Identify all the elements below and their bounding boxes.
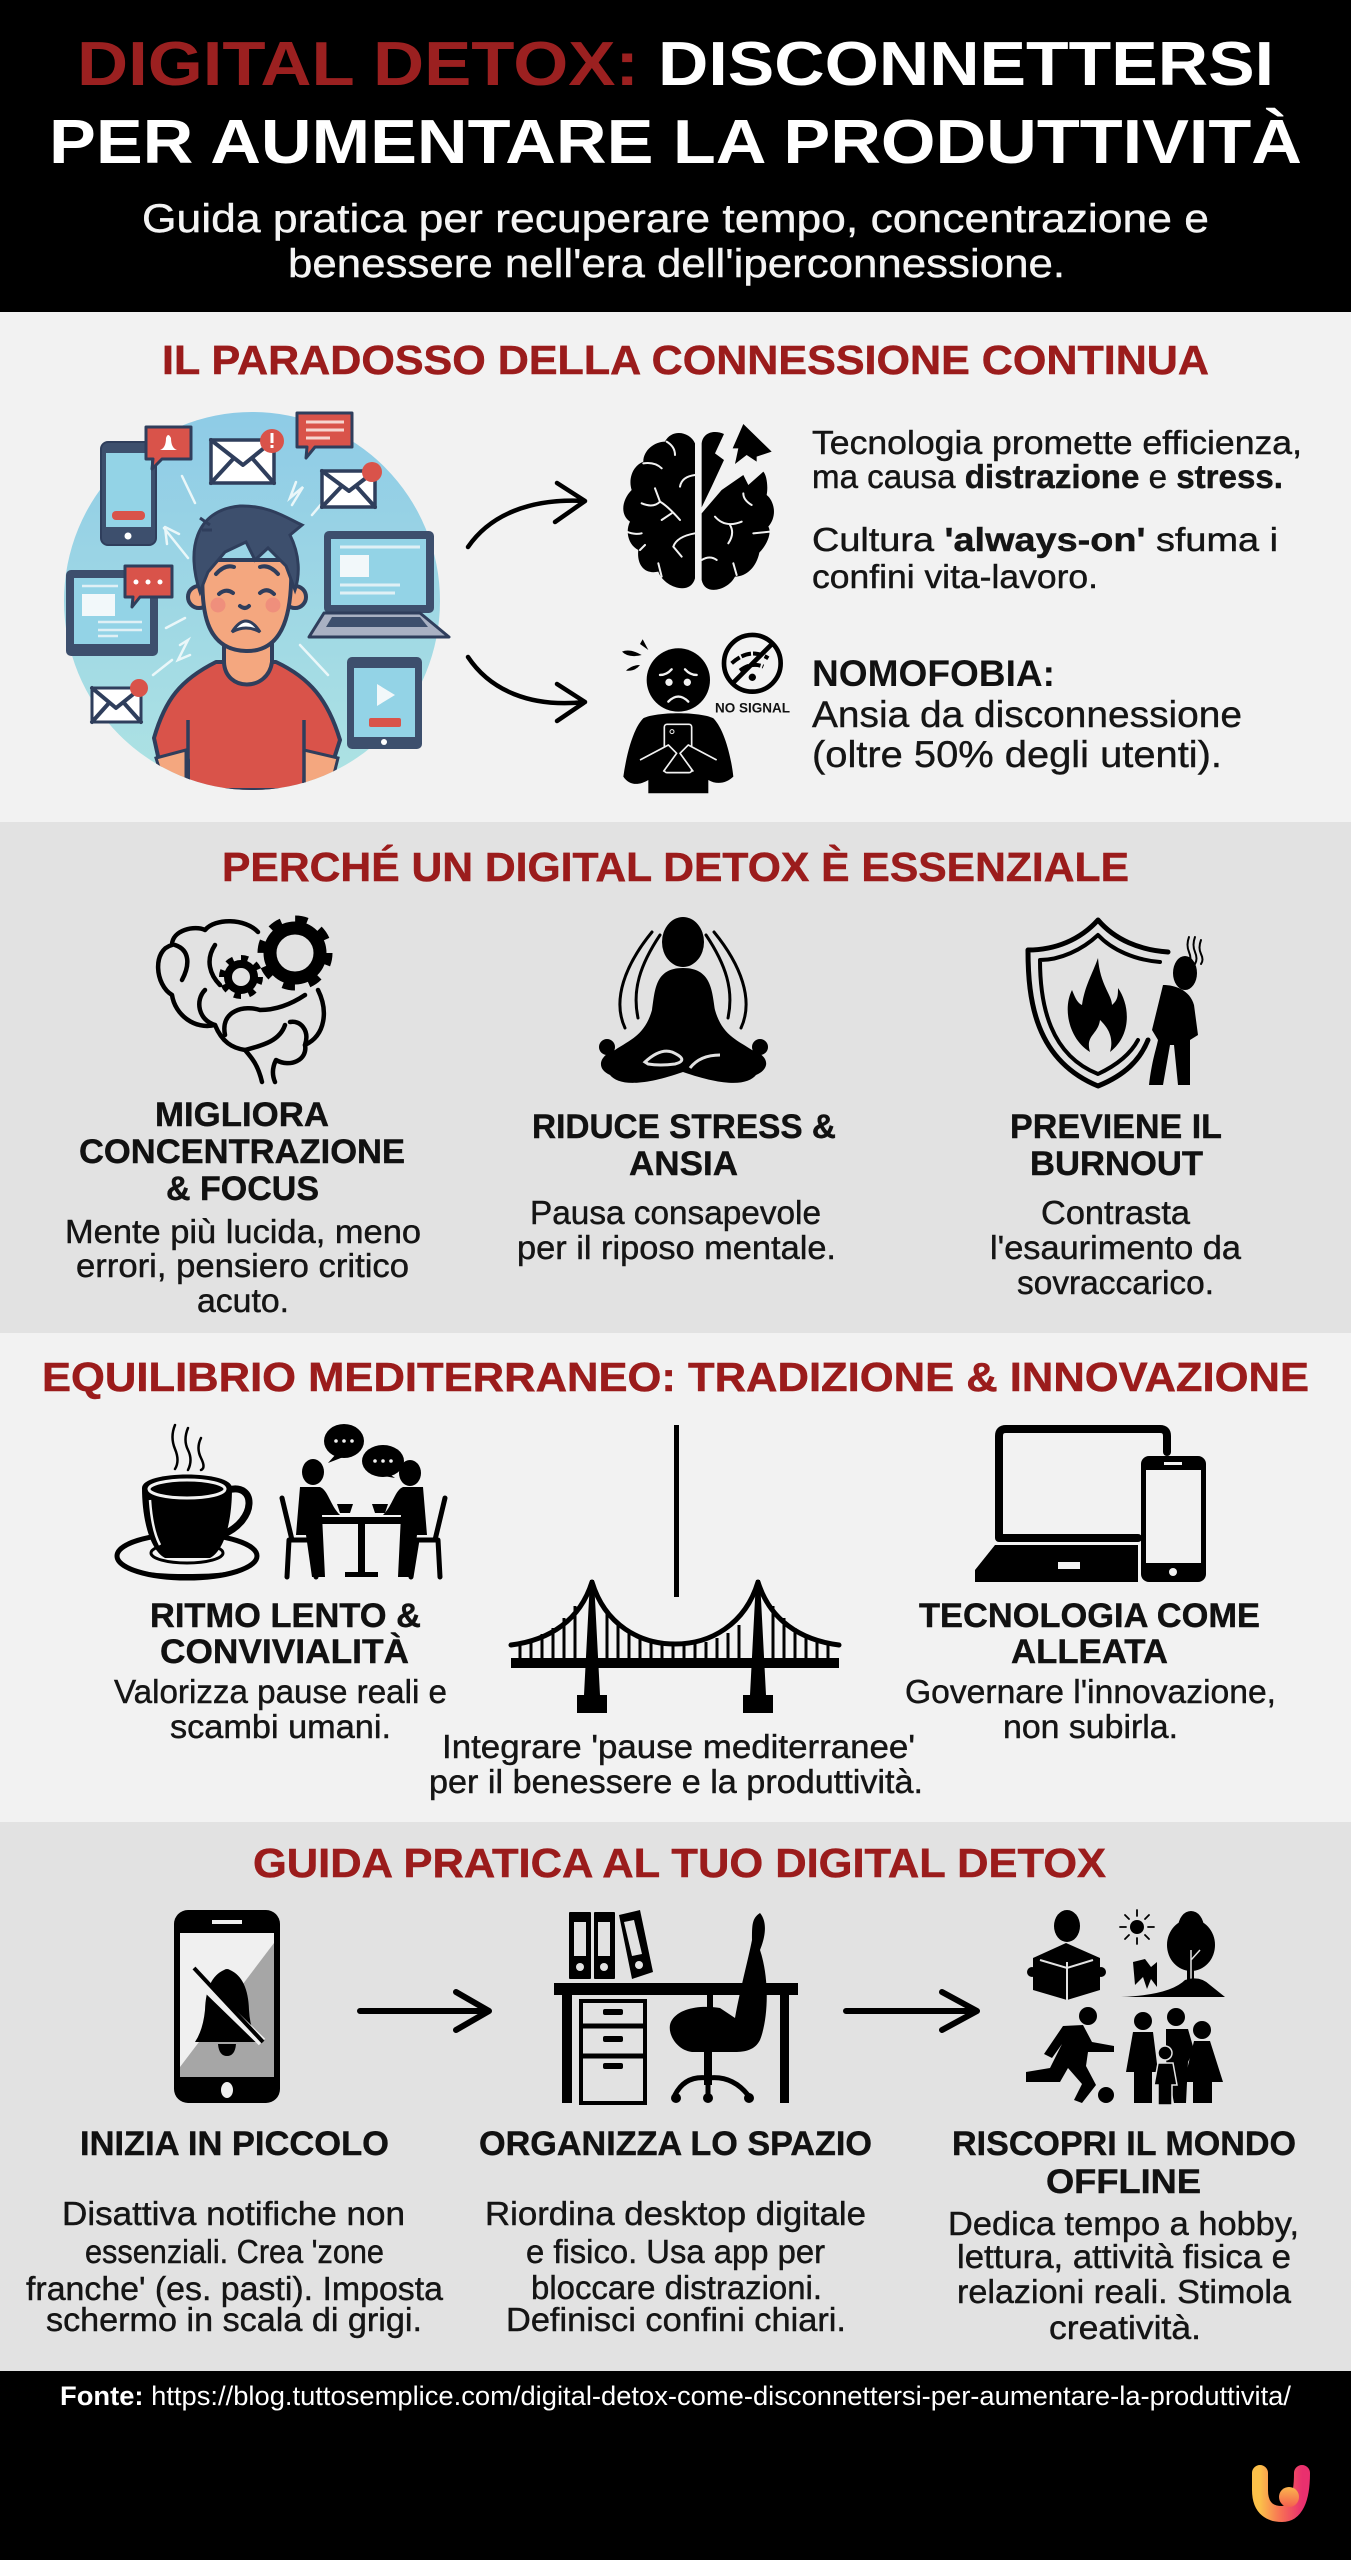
text: nomofobia: Ansia da disconnessione: [812, 694, 1242, 735]
column: inizia in piccolo: essenziali. Crea 'zone: [85, 2233, 384, 2270]
text: nomofobia: NOMOFOBIA:: [812, 653, 1055, 694]
column: burnout: [990, 1108, 1242, 1301]
column: concentrazione: errori, pensiero critico: [76, 1247, 409, 1284]
column: organizza lo spazio: bloccare distrazioni.: [531, 2269, 822, 2306]
column: stress: Pausa consapevole: [530, 1194, 821, 1231]
column: organizza lo spazio: e fisico. Usa app per: [526, 2233, 825, 2270]
column: organizza lo spazio: Riordina desktop digitale: [485, 2195, 866, 2232]
column: organizza lo spazio: [479, 2125, 872, 2338]
column: riscopri il mondo offline: relazioni reali. Stimola: [957, 2273, 1292, 2310]
footer: [0, 2371, 1351, 2560]
column: inizia in piccolo: [26, 2125, 444, 2338]
text: technology promise: Cultura 'always-on' sfuma i: [812, 521, 1278, 558]
column: riscopri il mondo offline: Dedica tempo a hobby,: [948, 2205, 1299, 2242]
column: stress: per il riposo mentale.: [517, 1229, 836, 1266]
subtitle: [142, 197, 1209, 286]
column: ritmo lento: CONVIVIALITÀ: [160, 1633, 409, 1671]
icon: phone silent: [174, 1910, 280, 2103]
column: integrare: [429, 1728, 923, 1800]
column: concentrazione: MIGLIORA: [155, 1096, 329, 1134]
column: integrare: per il benessere e la produttività.: [429, 1763, 923, 1800]
column: concentrazione: [65, 1096, 421, 1319]
column: riscopri il mondo offline: lettura, attività fisica e: [957, 2238, 1291, 2275]
icon: offline activities: [1026, 1910, 1225, 2105]
text: technology promise: confini vita-lavoro.: [812, 558, 1098, 595]
illustration: overwhelmed person with devices: [64, 412, 449, 790]
column: stress: ANSIA: [629, 1145, 738, 1183]
icon: cracked brain: [623, 424, 774, 590]
column: burnout: l'esaurimento da: [990, 1229, 1242, 1266]
line: divider above bridge: [674, 1425, 679, 1597]
text: nomofobia: (oltre 50% degli utenti).: [812, 734, 1222, 775]
arrow: to distraction: [468, 483, 585, 547]
title line 1: [77, 30, 1274, 99]
column: burnout: Contrasta: [1041, 1194, 1191, 1231]
subtitle: Guida pratica per recuperare tempo, concentrazione e: [142, 197, 1209, 241]
devices: [66, 413, 449, 749]
column: stress: RIDUCE STRESS &: [532, 1108, 836, 1146]
column: tecnologia: non subirla.: [1003, 1708, 1178, 1745]
panel: equilibrio mediterraneo: [0, 1333, 1351, 1822]
icon: brain with gears: [158, 920, 328, 1082]
no signal label: NO SIGNAL: [715, 700, 790, 716]
icon: suspension bridge: [511, 1580, 839, 1713]
title line 1: DIGITAL DETOX:: [77, 30, 639, 99]
icon: people at table: [282, 1424, 445, 1577]
arrow: step two to three: [846, 1992, 977, 2030]
icon: coffee cup: [116, 1425, 258, 1580]
column: ritmo lento: Valorizza pause reali e: [114, 1673, 447, 1710]
column: burnout: BURNOUT: [1030, 1145, 1203, 1183]
column: stress: [517, 1108, 836, 1266]
text: technology promise: [812, 424, 1302, 595]
column: organizza lo spazio: Definisci confini chiari.: [506, 2301, 846, 2338]
heading: perché: PERCHÉ UN DIGITAL DETOX È ESSENZIALE: [222, 844, 1129, 890]
panel: perché un digital detox: [0, 822, 1351, 1333]
text: nomofobia: [812, 653, 1242, 775]
person: [154, 506, 340, 790]
column: tecnologia: Governare l'innovazione,: [905, 1673, 1276, 1710]
icon: tidy desk: [554, 1910, 798, 2103]
column: tecnologia: TECNOLOGIA COME: [919, 1597, 1260, 1635]
column: organizza lo spazio: ORGANIZZA LO SPAZIO: [479, 2125, 872, 2163]
heading: guida: GUIDA PRATICA AL TUO DIGITAL DETOX: [253, 1840, 1106, 1886]
icon: anxious person no signal: [622, 635, 790, 793]
column: inizia in piccolo: franche' (es. pasti). Imposta: [26, 2270, 444, 2307]
panel: guida pratica: [0, 1822, 1351, 2371]
icon: logo: [1260, 2473, 1302, 2514]
icon: shield flame burnout: [1028, 920, 1202, 1086]
column: ritmo lento: RITMO LENTO &: [150, 1597, 421, 1635]
title line 1: DISCONNETTERSI: [658, 30, 1274, 99]
source link text: Fonte: https://blog.tuttosemplice.com/digital-detox-come-disconnettersi-per-aumentare-la-produttivita/: [60, 2381, 1292, 2411]
column: concentrazione: & FOCUS: [166, 1170, 319, 1208]
subtitle: benessere nell'era dell'iperconnessione.: [288, 242, 1065, 286]
panel: paradosso della connessione: [0, 312, 1351, 822]
column: inizia in piccolo: Disattiva notifiche non: [62, 2195, 405, 2232]
header panel: [0, 0, 1351, 312]
column: concentrazione: Mente più lucida, meno: [65, 1213, 421, 1250]
column: ritmo lento: scambi umani.: [170, 1708, 391, 1745]
column: concentrazione: acuto.: [197, 1282, 289, 1319]
column: tecnologia: ALLEATA: [1011, 1633, 1168, 1671]
text: technology promise: Tecnologia promette efficienza,: [812, 424, 1302, 461]
column: riscopri il mondo offline: RISCOPRI IL MONDO: [952, 2125, 1296, 2163]
heading: equilibrio: EQUILIBRIO MEDITERRANEO: TRADIZIONE & INNOVAZIONE: [42, 1354, 1309, 1400]
arrow: to nomophobia: [468, 657, 585, 721]
column: inizia in piccolo: INIZIA IN PICCOLO: [80, 2125, 389, 2163]
column: concentrazione: CONCENTRAZIONE: [79, 1133, 405, 1171]
column: riscopri il mondo offline: OFFLINE: [1046, 2163, 1201, 2201]
column: burnout: sovraccarico.: [1017, 1264, 1214, 1301]
column: ritmo lento: [114, 1597, 447, 1745]
column: riscopri il mondo offline: creatività.: [1049, 2309, 1201, 2346]
icon: laptop and phone: [975, 1429, 1206, 1582]
column: burnout: PREVIENE IL: [1010, 1108, 1222, 1146]
column: inizia in piccolo: schermo in scala di grigi.: [46, 2301, 422, 2338]
icon: meditating figure: [599, 917, 768, 1083]
arrow: step one to two: [360, 1992, 489, 2030]
column: riscopri il mondo offline: [948, 2125, 1299, 2346]
column: integrare: Integrare 'pause mediterranee': [442, 1728, 915, 1765]
column: tecnologia: [905, 1597, 1276, 1745]
text: technology promise: ma causa distrazione e stress.: [812, 458, 1283, 495]
heading: paradosso: IL PARADOSSO DELLA CONNESSIONE CONTINUA: [162, 337, 1209, 383]
title line 2: PER AUMENTARE LA PRODUTTIVITÀ: [49, 108, 1302, 177]
